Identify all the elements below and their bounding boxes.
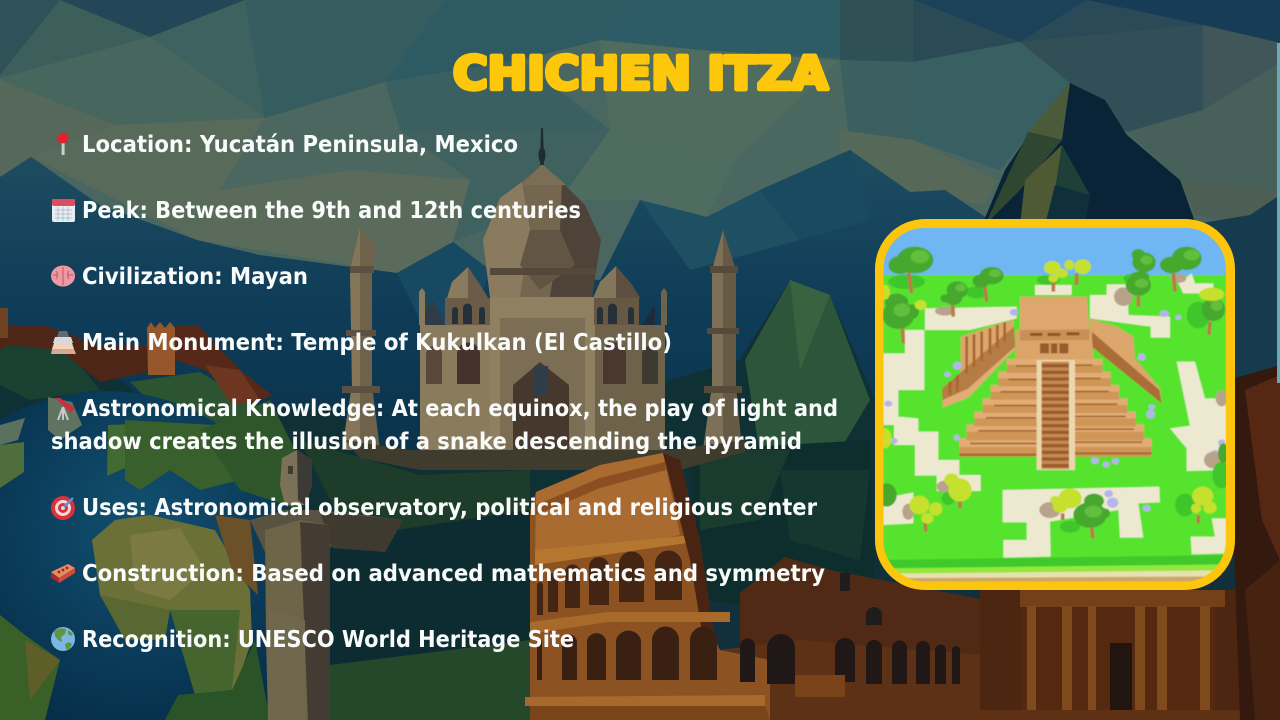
island edge	[888, 555, 1223, 568]
icon: round pin	[58, 133, 68, 155]
fact: astronomical knowledge: shadow creates the illusion of a snake descending the pyramid	[51, 429, 802, 455]
icon: brain	[51, 266, 75, 286]
sky	[883, 228, 1226, 278]
left balustrade	[961, 320, 1015, 375]
dark mountain peak on the right	[980, 83, 1198, 240]
icon: brick	[51, 564, 75, 583]
fact: location: Location: Yucatán Peninsula, Mexico	[82, 132, 518, 158]
temple top	[1015, 330, 1093, 359]
taj mahal	[342, 128, 745, 470]
right balustrade	[1089, 318, 1162, 403]
yellow frame	[875, 219, 1235, 590]
fact: astronomical knowledge: Astronomical Knowledge: At each equinox, the play of light and	[82, 396, 838, 422]
great wall	[0, 308, 272, 405]
green hills	[0, 280, 880, 720]
island scene	[877, 228, 1231, 582]
image card: Chichen Itza pyramid illustration	[875, 219, 1235, 590]
sky polygons	[0, 0, 1280, 420]
fact: peak: Peak: Between the 9th and 12th centuries	[82, 198, 581, 224]
christ statue	[250, 450, 403, 720]
pyramid	[942, 297, 1162, 470]
globe	[0, 391, 314, 720]
cream paths	[883, 273, 1226, 558]
fact: uses: Uses: Astronomical observatory, political and religious center	[82, 495, 818, 521]
trunks	[902, 270, 1210, 538]
fact: civilization: Civilization: Mayan	[82, 264, 308, 290]
green trees	[877, 247, 1229, 528]
fact: construction: Construction: Based on advanced mathematics and symmetry	[82, 561, 825, 587]
icon: globe americas	[51, 627, 75, 651]
stepped terraces	[959, 359, 1152, 457]
icon: calendar	[52, 199, 75, 222]
fact: main monument: Main Monument: Temple of Kukulkan (El Castillo)	[82, 330, 672, 356]
icon: telescope	[55, 398, 75, 420]
pebbles	[884, 309, 1225, 512]
grass	[883, 275, 1226, 582]
fact list	[51, 132, 838, 653]
icon: target with dart	[51, 496, 75, 520]
fact: astronomical knowledge	[51, 396, 838, 455]
colosseum	[525, 453, 985, 720]
icon: japanese castle	[51, 331, 76, 354]
title: CHICHEN ITZA	[453, 47, 828, 100]
tree highlights	[893, 250, 1223, 518]
central stairway	[1037, 360, 1075, 470]
blue mountain range	[0, 150, 1280, 480]
shadows	[888, 273, 1231, 533]
right edge strip	[1277, 43, 1280, 383]
fact: recognition: Recognition: UNESCO World Heritage Site	[82, 627, 574, 653]
yellow trees	[878, 259, 1224, 524]
petra cliff and facade	[980, 365, 1280, 720]
